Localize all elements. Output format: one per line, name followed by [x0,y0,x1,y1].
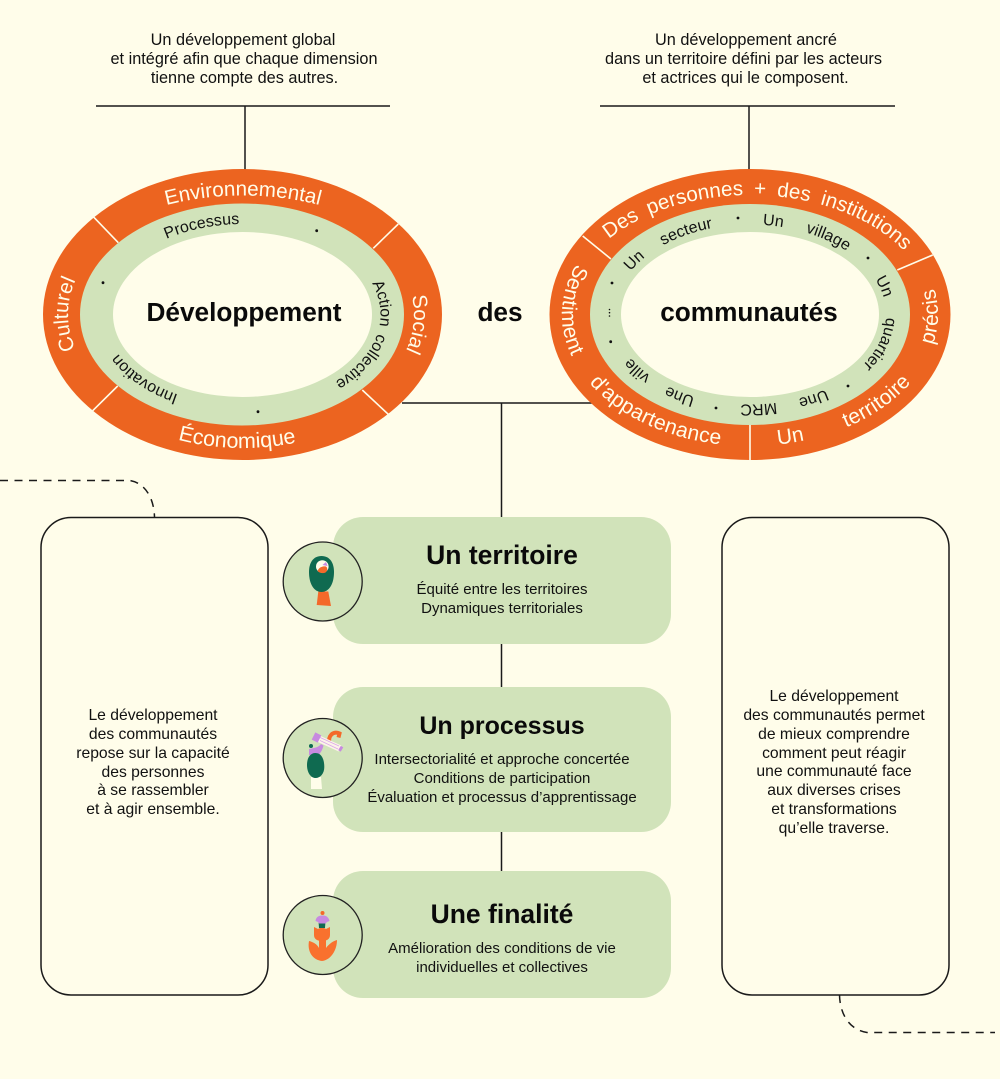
word: des: des [477,297,523,327]
ellipse: développement: Développement [146,297,342,327]
text: anchored development definition [605,31,882,87]
text: anchored development definition: Un développement ancré [655,31,837,49]
panel: un processus: Intersectorialité et approche concertée [374,751,630,768]
panel: un territoire: Équité entre les territoires [417,581,587,598]
panel: right note: Le développement [769,688,899,705]
dashed line: top left [0,480,154,517]
ellipse: communautés: Une [800,390,829,406]
icon: tulip with figure [283,896,362,974]
text: anchored development definition: dans un territoire défini par les acteurs [605,50,882,68]
ellipse: développement: Culturel [53,276,75,351]
panel: left note [41,518,268,995]
panel: left note: des personnes [102,764,205,781]
panel: right note: de mieux comprendre [758,726,910,743]
panel: une finalité [333,871,671,998]
connector: right definition to ellipse [600,106,895,170]
icon: process figure with pencil [283,718,362,798]
panel: right note: et transformations [771,801,897,818]
panel: un territoire: Un territoire [426,540,578,570]
panel: left note: Le développement [88,707,218,724]
panel: un territoire: Dynamiques territoriales [421,600,583,617]
ellipse: développement: Social [406,296,428,356]
ellipse: développement: Action collective [336,282,392,388]
panel: left note: et à agir ensemble. [86,801,220,818]
text: global development definition: tienne compte des autres. [151,69,338,87]
ellipse: développement: Innovation [112,354,177,404]
connector: ellipses to territory box [402,403,592,518]
text: global development definition [110,31,378,87]
ellipse: communautés: Des personnes + des institutions [602,182,910,249]
panel: une finalité: Une finalité [431,899,573,929]
panel: un processus [333,687,671,832]
panel: une finalité: Amélioration des conditions de vie [388,940,616,957]
panel: left note: repose sur la capacité [76,745,230,762]
text: global development definition: et intégré afin que chaque dimension [110,50,378,68]
ellipse: communautés: village [808,224,850,250]
panel: une finalité: individuelles et collectives [416,959,588,976]
ellipse: communautés: Un [623,252,644,269]
panel: right note: comment peut réagir [762,745,906,762]
ellipse: communautés: ville [626,359,648,383]
ellipse: communautés: communautés [660,297,838,327]
ellipse: développement [43,169,442,460]
ellipse: développement: Processus [164,216,239,238]
panel: left note: à se rassembler [97,782,209,799]
ellipse: communautés: Sentiment d'appartenance [562,266,720,444]
ellipse: communautés: Un [877,275,891,297]
panel: un processus: Évaluation et processus d’apprentissage [367,789,637,806]
panel: un processus: Conditions de participation [414,770,590,787]
icon: territory seed with figure [283,542,362,621]
ellipse: communautés: MRC [741,403,776,416]
ellipse: développement: Économique [180,423,295,452]
panel: right note: des communautés permet [743,707,925,724]
text: global development definition: Un développement global [151,31,335,49]
ellipse: communautés [550,169,950,460]
panel: un processus: Un processus [419,712,585,740]
panel: right note: aux diverses crises [767,782,901,799]
dashed line: bottom right [840,995,995,1032]
panel: right note: qu’elle traverse. [779,820,889,837]
panel: right note: une communauté face [756,763,912,780]
panel: right note [722,518,949,995]
ellipse: communautés: secteur [660,220,711,244]
ellipse: communautés: Un [764,214,783,227]
panel: left note: des communautés [89,726,217,743]
ellipse: communautés: Un territoire précis [778,290,938,444]
text: anchored development definition: et actrices qui le composent. [642,69,849,87]
connectors between green panels [500,644,502,871]
connector: left definition to ellipse [96,106,390,170]
ellipse: développement: Environnemental [164,183,322,205]
ellipse: communautés: Une [666,388,693,407]
ellipse: communautés: quartier [864,318,894,371]
panel: un territoire [333,517,671,644]
